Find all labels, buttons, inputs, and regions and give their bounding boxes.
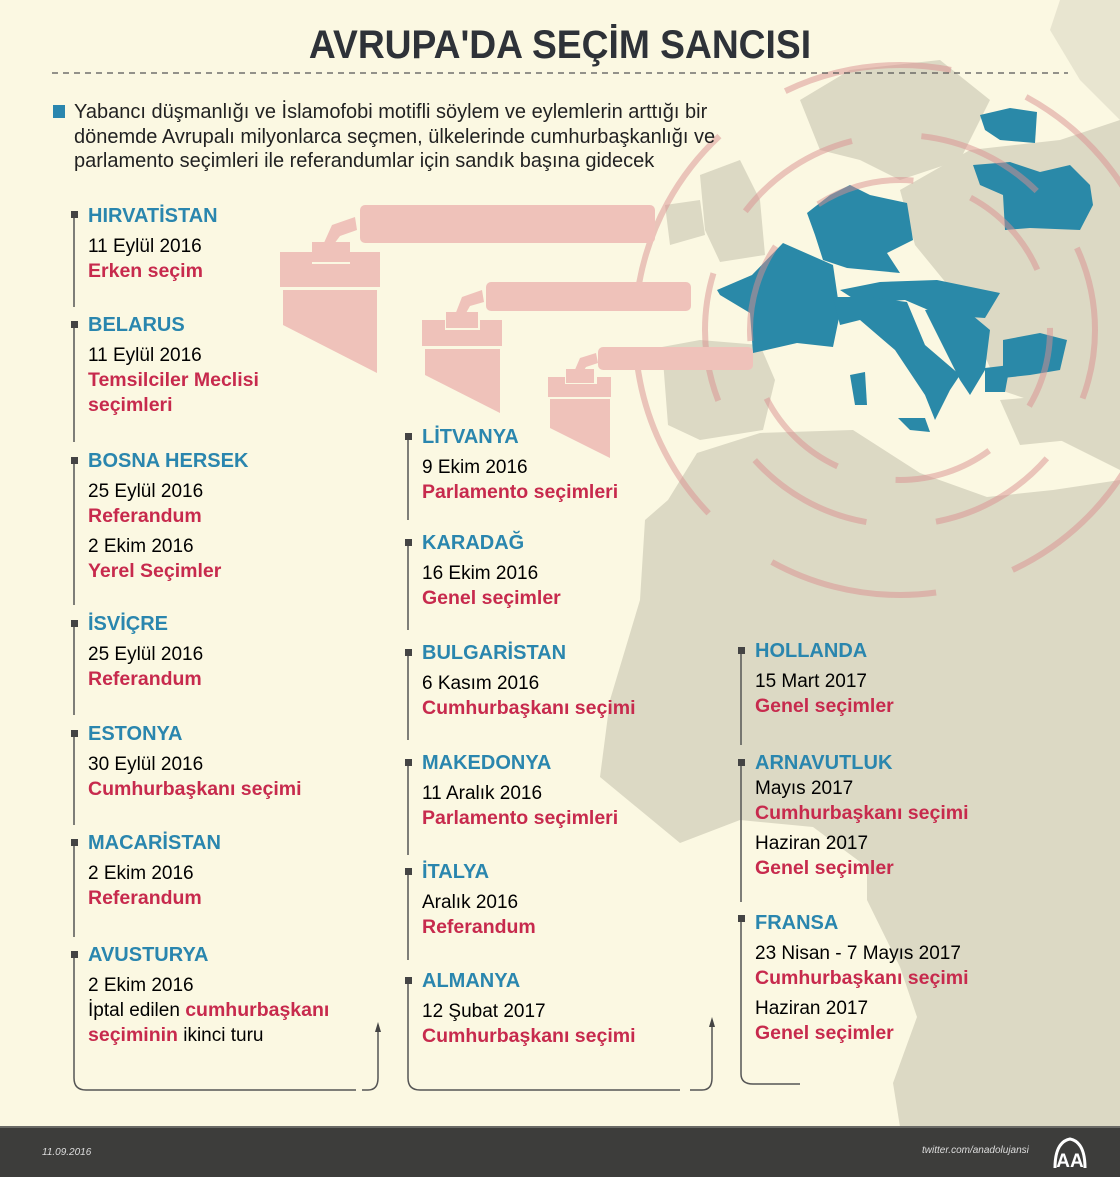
entry: Almanya: [422, 970, 636, 1047]
entry: Bosna Hersek: 2 Ekim 2016: [88, 536, 194, 557]
entry: Karadağ: 16 Ekim 2016: [422, 563, 538, 584]
entry: Fransa: FRANSA: [755, 912, 838, 934]
entry: Avusturya: [88, 944, 329, 1046]
entry: Makedonya: 11 Aralık 2016: [422, 783, 542, 804]
entry: İtalya: [422, 860, 536, 938]
map: highlighted countries: [717, 108, 1093, 432]
entry: Karadağ: Genel seçimler: [422, 587, 561, 609]
entry: Fransa: Haziran 2017: [755, 998, 868, 1019]
footer twitter: twitter.com/anadolujansi: [922, 1145, 1029, 1156]
entry: Macaristan: Referandum: [88, 887, 202, 909]
timeline lines: [74, 214, 800, 1090]
entry: Macaristan: 2 Ekim 2016: [88, 863, 194, 884]
entry: Fransa: [755, 912, 968, 1044]
entry: Macaristan: MACARİSTAN: [88, 832, 221, 854]
entry: Bulgaristan: 6 Kasım 2016: [422, 673, 539, 694]
entry: Fransa: Cumhurbaşkanı seçimi: [755, 967, 968, 989]
entry: Bosna Hersek: [88, 450, 248, 582]
entry: Almanya: ALMANYA: [422, 970, 520, 992]
entry: Avusturya: 2 Ekim 2016: [88, 975, 194, 996]
entry: Karadağ: [422, 530, 561, 609]
entry: İsviçre: [88, 612, 203, 690]
entry: Arnavutluk: [755, 752, 968, 879]
entry: Belarus: BELARUS: [88, 314, 185, 336]
entry: Avusturya: seçiminin ikinci turu: [88, 1024, 263, 1046]
intro text: parlamento seçimleri ile referandumlar için sandık başına gidecek: [74, 150, 654, 172]
entry: Litvanya: 9 Ekim 2016: [422, 457, 528, 478]
entry: Bosna Hersek: Referandum: [88, 505, 202, 527]
entry: Hırvatistan: Erken seçim: [88, 260, 203, 282]
entry: İsviçre: İSVİÇRE: [88, 613, 168, 635]
entry: Avusturya: AVUSTURYA: [88, 944, 208, 966]
concentric dashed arcs: [635, 65, 1120, 595]
entry: Belarus: [88, 314, 259, 416]
footer: [0, 1126, 1120, 1177]
entry: İtalya: İTALYA: [422, 861, 489, 883]
entry: Arnavutluk: Genel seçimler: [755, 857, 894, 879]
entry: Arnavutluk: Haziran 2017: [755, 833, 868, 854]
entry: Litvanya: Parlamento seçimleri: [422, 481, 618, 503]
entry: Bulgaristan: [422, 642, 636, 719]
entry: İtalya: Referandum: [422, 916, 536, 938]
entry: Hollanda: [755, 640, 894, 717]
title: AVRUPA'DA SEÇİM SANCISI: [309, 23, 811, 67]
entry: Hırvatistan: [88, 204, 218, 282]
intro text: Yabancı düşmanlığı ve İslamofobi motifli söylem ve eylemlerin arttığı bir: [74, 101, 707, 123]
entry: Hırvatistan: HIRVATİSTAN: [88, 205, 218, 227]
entry: İsviçre: Referandum: [88, 668, 202, 690]
entry: Hollanda: Genel seçimler: [755, 695, 894, 717]
entry: Bosna Hersek: 25 Eylül 2016: [88, 481, 203, 502]
entry: Macaristan: [88, 832, 221, 909]
entry: Estonya: [88, 723, 302, 800]
entry: Estonya: ESTONYA: [88, 723, 182, 745]
entry: Bosna Hersek: BOSNA HERSEK: [88, 450, 248, 472]
entry: Makedonya: [422, 752, 618, 829]
entry: Hollanda: 15 Mart 2017: [755, 671, 867, 692]
icon: blue square bullet: [53, 105, 65, 118]
entry: Bosna Hersek: Yerel Seçimler: [88, 560, 221, 582]
entry: Arnavutluk: Mayıs 2017: [755, 778, 853, 799]
icon: AA logo: [1054, 1138, 1086, 1170]
entry: Karadağ: KARADAĞ: [422, 532, 524, 554]
entry: Makedonya: MAKEDONYA: [422, 752, 551, 774]
entry: İsviçre: 25 Eylül 2016: [88, 644, 203, 665]
entry: Hollanda: HOLLANDA: [755, 640, 867, 662]
entry: Belarus: Temsilciler Meclisi: [88, 369, 259, 391]
entry: Litvanya: [422, 426, 618, 503]
footer date: 11.09.2016: [42, 1147, 91, 1158]
entry: Belarus: 11 Eylül 2016: [88, 345, 202, 366]
entry: Avusturya: İptal edilen cumhurbaşkanı: [88, 999, 329, 1021]
intro text: [53, 100, 715, 172]
ballot boxes: [280, 205, 753, 458]
entry: Bulgaristan: BULGARİSTAN: [422, 642, 566, 664]
entry: Arnavutluk: Cumhurbaşkanı seçimi: [755, 802, 968, 824]
entry: Estonya: 30 Eylül 2016: [88, 754, 203, 775]
entry: Hırvatistan: 11 Eylül 2016: [88, 236, 202, 257]
entry: Litvanya: LİTVANYA: [422, 426, 519, 448]
entry: Fransa: 23 Nisan - 7 Mayıs 2017: [755, 943, 961, 964]
entry: Estonya: Cumhurbaşkanı seçimi: [88, 778, 302, 800]
entry: Almanya: Cumhurbaşkanı seçimi: [422, 1025, 636, 1047]
entry: Fransa: Genel seçimler: [755, 1022, 894, 1044]
map: grey land: [600, 0, 1120, 1127]
entry: İtalya: Aralık 2016: [422, 892, 518, 913]
entry: Arnavutluk: ARNAVUTLUK: [755, 752, 892, 774]
entry: Makedonya: Parlamento seçimleri: [422, 807, 618, 829]
entry: Bulgaristan: Cumhurbaşkanı seçimi: [422, 697, 636, 719]
dashed divider: [52, 72, 1068, 74]
entry: Almanya: 12 Şubat 2017: [422, 1001, 546, 1022]
entry: Belarus: seçimleri: [88, 394, 173, 416]
intro text: dönemde Avrupalı milyonlarca seçmen, ülkelerinde cumhurbaşkanlığı ve: [74, 126, 715, 148]
